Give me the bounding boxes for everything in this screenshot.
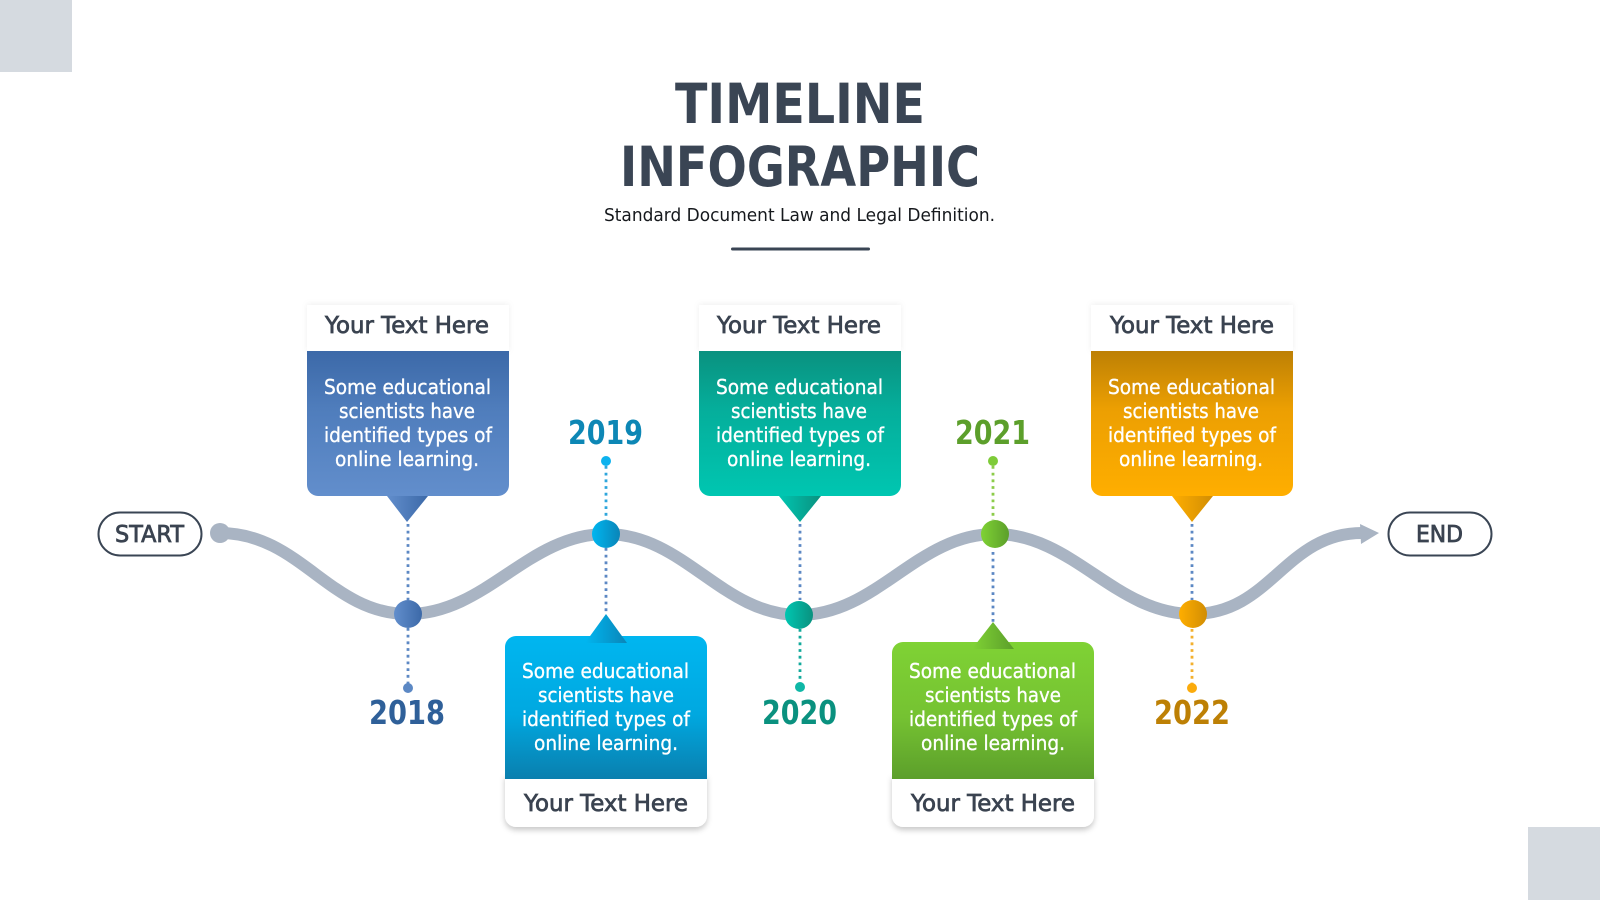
year: 2020: 2020: [762, 693, 837, 732]
milestone marker: 2019: [592, 456, 620, 548]
panel: orange card 2022: [1091, 305, 1293, 522]
milestone marker: 2018: [394, 600, 422, 693]
card text: Some educational: [324, 375, 491, 399]
card body: [699, 351, 901, 496]
start pill: START: [115, 522, 185, 548]
card text: scientists have: [925, 683, 1061, 707]
card text: Some educational: [522, 659, 689, 683]
card text: identified types of: [716, 423, 885, 447]
milestone marker: 2020: [785, 601, 813, 692]
card heading: [307, 305, 509, 352]
card heading: [892, 775, 1094, 827]
timeline wave with start dot and end arrow: [210, 523, 1379, 615]
card text: Some educational: [716, 375, 883, 399]
card text: identified types of: [1108, 423, 1277, 447]
card text: scientists have: [731, 399, 867, 423]
milestone marker: 2022: [1179, 600, 1207, 693]
year: 2018: 2018: [369, 693, 445, 732]
milestone marker: 2021: [981, 456, 1009, 548]
card heading: Your Text Here: [716, 313, 881, 339]
subtitle: Standard Document Law and Legal Definition.: [604, 205, 995, 226]
panel: blue card 2018: [307, 305, 509, 522]
card heading: Your Text Here: [1109, 313, 1274, 339]
pointer: [387, 496, 428, 522]
end pill: END: [1416, 522, 1463, 548]
card heading: Your Text Here: [523, 791, 688, 817]
title: INFOGRAPHIC: [620, 135, 980, 199]
start pill: [98, 512, 202, 556]
card text: scientists have: [1123, 399, 1259, 423]
title: [620, 72, 980, 199]
card text: identified types of: [522, 707, 691, 731]
card heading: [1091, 305, 1293, 352]
card text: [324, 375, 493, 471]
card text: identified types of: [909, 707, 1078, 731]
card heading: [699, 305, 901, 352]
card text: online learning.: [335, 447, 479, 471]
card text: [716, 375, 885, 471]
pointer: [1172, 496, 1213, 522]
card text: scientists have: [339, 399, 475, 423]
card text: identified types of: [324, 423, 493, 447]
card body: [892, 642, 1094, 779]
panel: green card 2021: [892, 622, 1094, 827]
card text: Some educational: [909, 659, 1076, 683]
year: 2019: 2019: [568, 413, 643, 452]
card text: online learning.: [534, 731, 678, 755]
card text: online learning.: [921, 731, 1065, 755]
card text: online learning.: [1119, 447, 1263, 471]
card text: online learning.: [727, 447, 871, 471]
year: 2021: 2021: [955, 413, 1030, 452]
card text: [522, 659, 691, 755]
title: TIMELINE: [675, 72, 925, 136]
end pill: [1388, 512, 1492, 556]
card heading: Your Text Here: [910, 791, 1075, 817]
year: 2022: 2022: [1154, 693, 1230, 732]
dotted connectors: [408, 466, 1192, 684]
card text: [909, 659, 1078, 755]
card text: [1108, 375, 1277, 471]
corner square: bottom right: [1528, 827, 1600, 900]
card body: [1091, 351, 1293, 496]
card heading: [505, 775, 707, 827]
card text: scientists have: [538, 683, 674, 707]
panel: teal card 2020: [699, 305, 901, 522]
corner square: top left: [0, 0, 72, 72]
pointer: [779, 496, 821, 522]
card body: [307, 351, 509, 496]
pointer: [585, 614, 627, 643]
panel: cyan card 2019: [505, 614, 707, 827]
title underline: [731, 248, 870, 250]
card body: [505, 636, 707, 779]
pointer: [972, 622, 1014, 649]
card text: Some educational: [1108, 375, 1275, 399]
card heading: Your Text Here: [324, 313, 489, 339]
